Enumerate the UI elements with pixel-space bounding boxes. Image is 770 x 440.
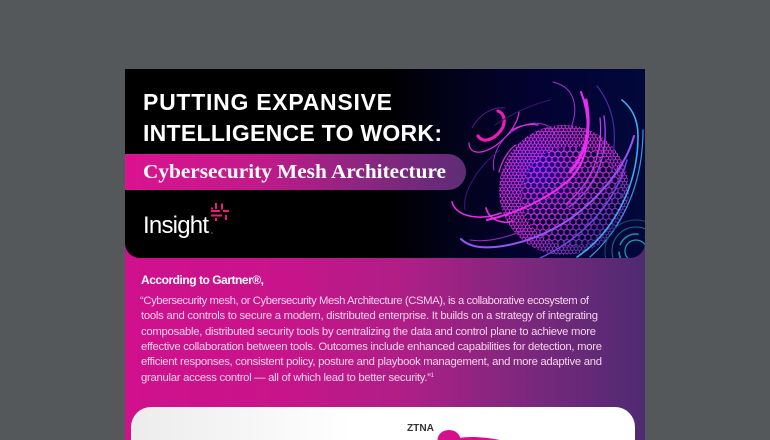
swirl rings <box>469 108 554 172</box>
orbit arcs <box>452 82 643 258</box>
quote text: granular access control — all of which lead to better security.” <box>141 372 431 384</box>
subtitle pill <box>125 154 466 190</box>
panel: gradient body <box>125 240 645 440</box>
node: ZTNA circle <box>438 430 460 440</box>
title <box>143 89 442 146</box>
panel: header <box>125 69 645 258</box>
label: ZTNA: ZTNA <box>407 422 434 434</box>
subtitle pill: Cybersecurity Mesh Architecture <box>143 161 446 183</box>
connector line <box>459 437 500 440</box>
sphere mesh <box>499 125 629 255</box>
quote text: efficient responses, consistent policy, posture and playbook management, and more adaptive and <box>141 356 602 368</box>
Insight logo: Insight <box>143 212 209 239</box>
quote text: effective collaboration between tools. Outcomes include enhanced capabilities for detection, more <box>141 341 602 353</box>
quote text: 1 <box>431 373 435 379</box>
title: INTELLIGENCE TO WORK: <box>143 120 442 146</box>
Insight logo <box>143 203 229 239</box>
icon: logo mark <box>211 203 229 221</box>
panel: white diagram card <box>131 407 635 440</box>
quote text: tools and controls to secure a modern, distributed enterprise. It builds on a strategy of integrating <box>141 310 598 322</box>
intro heading: According to Gartner®, <box>141 273 264 287</box>
title: PUTTING EXPANSIVE <box>143 89 392 115</box>
illustration: mesh sphere <box>451 82 645 258</box>
teal rings <box>604 220 645 258</box>
quote text: composable, distributed security tools by centralizing the data and control plane to achieve more <box>141 326 596 338</box>
quote text: “Cybersecurity mesh, or Cybersecurity Mesh Architecture (CSMA), is a collaborative ecosystem of <box>140 295 590 307</box>
quote text <box>140 295 602 384</box>
